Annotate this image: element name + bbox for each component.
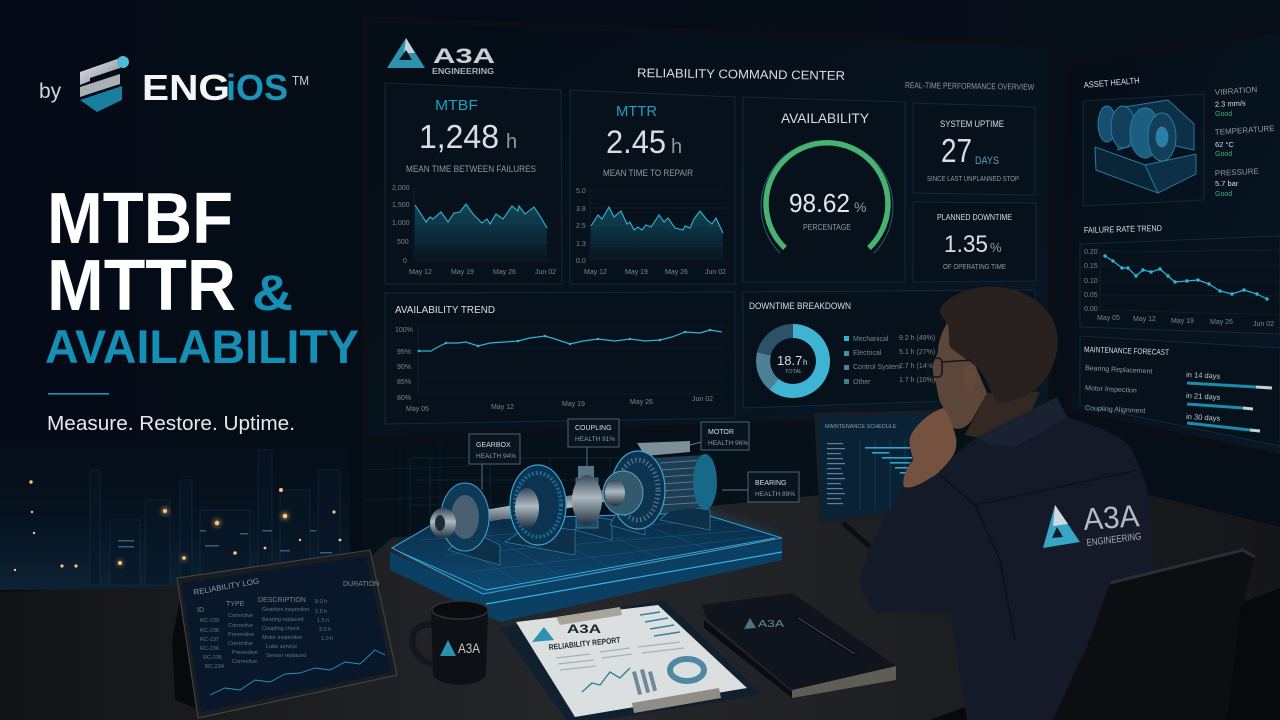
trend line chart [395,327,726,413]
log table: Sensor replaced [266,653,306,659]
clipboard: reliability report [500,600,762,720]
holographic base plate [390,513,782,622]
report logo: A3A [567,622,601,636]
dashboard heading: RELIABILITY COMMAND CENTER [637,66,845,83]
panel: maintenance forecast [1080,336,1280,446]
tagline: Measure. Restore. Uptime. [47,413,295,435]
callout: motor [690,422,749,450]
gauge [761,141,893,253]
vibration reading: 2.3 mm/s [1215,98,1246,109]
log table: DURATION [343,581,379,588]
log table: Corrective [232,659,257,665]
log table: Corrective [228,623,253,629]
MTTR line chart [576,188,726,276]
log table: 3.0 h [319,627,331,633]
gauge: PERCENTAGE [803,223,851,232]
MTTR line chart: 0.0 [576,258,586,265]
pressure reading [1215,167,1259,198]
legend: 2.7 h (14%) [899,363,935,370]
MTTR line chart: 1.3 [576,241,586,248]
callout: coupling: HEALTH 91% [575,436,615,443]
panel: availability trend [385,292,735,424]
trend line chart: 80% [397,395,411,402]
donut chart: TOTAL [785,369,802,375]
MTTR line chart: Jun 02 [705,269,726,276]
failure rate line chart: 0.20 [1084,249,1098,256]
left column: brand logo: by [39,80,62,103]
left column: brand logo [39,56,309,112]
panel: MTTR [570,90,735,284]
forecast rows: Motor Inspection [1085,385,1137,395]
MTBF line chart: 1,000 [392,220,410,227]
legend: 1.7 h (10%) [899,377,935,384]
log table: Gearbox inspection [262,607,309,613]
log table: RC-234 [205,664,224,670]
panel: maintenance forecast: MAINTENANCE FORECAST [1084,345,1169,357]
report chart [582,668,630,692]
forecast rows: in 21 days [1186,391,1221,402]
title: MTBF [47,179,233,259]
panel: failure rate trend [1080,223,1280,334]
callout: motor: MOTOR [708,429,734,436]
small desk monitor: maintenance schedule: MAINTENANCE SCHEDULE [825,424,897,430]
failure rate line chart [1084,249,1280,328]
hologram machine [390,419,799,622]
desk surface [0,495,1280,720]
donut chart [763,331,823,391]
engineer [860,287,1153,720]
failure rate line chart: 0.00 [1084,306,1098,313]
tablet: reliability log: RELIABILITY LOG [193,577,260,597]
callout: bearing: HEALTH 89% [755,491,795,498]
failure rate line chart: May 12 [1133,316,1156,323]
log table: RC-239 [200,618,219,624]
log table: Bearing replaced [262,617,304,623]
MTBF value [406,97,536,174]
panel: system uptime: DAYS [975,155,999,167]
MTTR line chart: 3.8 [576,206,586,213]
report text lines [556,642,684,670]
callout: bearing [722,472,799,502]
pressure reading: Good [1215,191,1232,198]
right side monitor [1066,26,1280,460]
panel: planned downtime [913,202,1036,282]
callout: motor: HEALTH 96% [708,440,748,447]
MTBF value: MTBF [435,97,478,114]
trend line chart: 95% [397,349,411,356]
trend line chart: 100% [395,327,413,334]
wall below monitor [362,417,1054,560]
report logo [532,622,601,642]
notebook: A3A [758,619,784,630]
panel: availability gauge [743,97,905,282]
trend line chart: May 26 [630,399,653,406]
MTTR line chart: 5.0 [576,188,586,195]
panel: planned downtime: PLANNED DOWNTIME [937,212,1012,222]
callout: gearbox: GEARBOX [476,442,511,449]
icon: pump blueprint [1095,100,1196,193]
title [45,179,359,373]
motor [603,441,717,529]
left column: brand logo: iOS [226,67,288,108]
engineer hand [903,408,956,488]
trend line chart: 90% [397,364,411,371]
log table: RC-235 [203,655,222,661]
panel: failure rate trend: FAILURE RATE TREND [1084,223,1162,235]
panel: MTBF [385,83,562,284]
gantt chart [827,440,912,510]
donut chart: h [803,358,807,367]
MTTR line chart: 2.5 [576,223,586,230]
donut chart: 18.7 [777,353,802,368]
log table [197,581,379,670]
panel: asset health: ASSET HEALTH [1083,75,1140,90]
log table: ID [197,607,204,614]
engineer ear [964,364,976,392]
callout: bearing: BEARING [755,480,787,487]
notebook [702,593,896,698]
MTTR value: 2.45 [606,124,666,160]
city skyline window [0,440,350,590]
MTTR line chart: May 12 [584,269,607,276]
MTBF value: MEAN TIME BETWEEN FAILURES [406,164,536,174]
office chair [1053,550,1255,720]
MTTR line chart: May 19 [625,269,648,276]
shaft [443,487,622,529]
logo: A3A Engineering: A3A [433,45,495,68]
failure rate line chart: 0.10 [1084,278,1098,285]
vibration reading [1215,85,1258,118]
panel: system uptime [913,103,1035,195]
callout: coupling: COUPLING [575,425,612,432]
report title: RELIABILITY REPORT [548,636,621,652]
trend line chart: May 05 [406,406,429,413]
trend line chart: May 19 [562,401,585,408]
legend: Mechanical [853,336,889,343]
MTTR value: MTTR [616,103,657,120]
temperature reading: Good [1215,151,1232,158]
MTBF line chart [392,185,556,276]
temperature reading: 62 °C [1215,140,1234,149]
MTTR value: h [671,136,682,158]
coupling hub [572,466,602,528]
log table: 2.5 h [315,609,327,615]
tablet: reliability log [172,550,397,718]
report donut [670,659,704,681]
legend [844,335,935,386]
failure rate line chart: 0.05 [1084,292,1098,299]
forecast rows: Bearing Replacement [1085,365,1153,376]
gearbox housing [430,483,489,551]
MTTR value [603,103,693,178]
pedestals [448,505,710,565]
forecast rows [1085,365,1272,431]
coupling disc [510,465,566,545]
log table: Preventive [232,650,258,656]
gauge: % [854,199,866,215]
forecast rows: Coupling Alignment [1085,405,1146,415]
failure rate line chart: May 19 [1171,318,1194,325]
jacket collar [977,397,1067,447]
forecast rows: in 30 days [1186,412,1221,423]
panel: availability trend: AVAILABILITY TREND [395,305,495,316]
report bars [640,612,680,636]
engineer glasses [928,358,972,377]
left column: brand logo: ENG [142,67,230,108]
legend: Electrical [853,350,882,357]
panel: system uptime: SYSTEM UPTIME [940,119,1004,129]
callout: coupling [568,419,619,466]
MTBF value: 1,248 [419,118,499,155]
panel: downtime breakdown: DOWNTIME BREAKDOWN [749,301,851,312]
panel: planned downtime: OF OPERATING TIME [943,262,1006,271]
coffee mug: A3A [458,640,481,656]
gauge: 98.62 [789,188,850,218]
holographic grid backdrop [410,458,710,540]
main monitor [363,16,1054,442]
log table: Corrective [228,613,253,619]
MTBF value: h [506,131,517,153]
log table: Coupling check [262,626,300,632]
panel: downtime breakdown [743,290,1035,408]
MTBF line chart: 1,500 [392,202,410,209]
pressure reading: PRESSURE [1215,167,1259,178]
legend: Other [853,379,871,386]
failure rate line chart: Jun 02 [1253,321,1274,328]
vibration reading: VIBRATION [1215,85,1258,97]
MTBF line chart: 500 [397,239,409,246]
availability title: AVAILABILITY [781,110,870,126]
MTBF line chart: 0 [403,258,407,265]
log table: Corrective [228,641,253,647]
MTBF line chart: May 26 [493,269,516,276]
MTTR line chart: May 26 [665,269,688,276]
temperature reading: TEMPERATURE [1215,124,1275,137]
log table: RC-238 [200,628,219,634]
MTBF line chart: May 12 [409,269,432,276]
vibration reading: Good [1215,111,1232,118]
pen [797,618,856,655]
jacket logo: A3A [1082,498,1141,537]
failure rate line chart: May 05 [1097,315,1120,322]
log table: RC-236 [200,646,219,652]
panel: system uptime: SINCE LAST UNPLANNED STOP [927,174,1019,183]
jacket logo: ENGINEERING [1086,531,1142,549]
MTBF line chart: Jun 02 [535,269,556,276]
trend line chart: Jun 02 [692,396,713,403]
log table: Lube service [266,644,297,650]
coffee mug [412,601,488,685]
jacket logo [1043,498,1142,549]
small desk monitor: maintenance schedule [814,410,940,547]
pressure reading: 5.7 bar [1215,179,1239,188]
panel: planned downtime: % [990,240,1002,255]
MTBF line chart: 2,000 [392,185,410,192]
title: MTTR [47,246,236,326]
callout: gearbox: HEALTH 94% [476,453,516,460]
title: AVAILABILITY [45,320,359,373]
legend: 9.2 h (49%) [899,335,935,342]
failure rate line chart: 0.15 [1084,263,1098,270]
log table: DESCRIPTION [258,597,306,604]
left column: brand logo: TM [292,73,309,88]
engineer hair [940,287,1058,403]
tablet sparkline [210,650,385,695]
log table: 8.0 h [315,599,327,605]
legend: Control System [853,364,901,371]
title: & [252,265,293,321]
desk front edge [930,588,1280,720]
dashboard subheading: REAL-TIME PERFORMANCE OVERVIEW [905,80,1034,92]
engineer neck and face [933,323,1040,445]
engineer jacket [860,397,1153,720]
log table: RC-237 [200,637,219,643]
log table: 1.0 h [321,636,333,642]
logo: A3A Engineering [387,38,495,76]
legend: 5.1 h (27%) [899,349,935,356]
panel: asset health [1083,75,1275,206]
log table: TYPE [226,601,245,608]
log table: Preventive [228,632,254,638]
log table: 1.5 h [317,618,329,624]
icon: ENGiOS mark [80,56,129,112]
panel: planned downtime: 1.35 [944,231,988,258]
failure rate line chart: May 26 [1210,319,1233,326]
callout: gearbox [469,434,520,490]
forecast rows: in 14 days [1186,370,1221,381]
MTTR value: MEAN TIME TO REPAIR [603,168,693,178]
trend line chart: May 12 [491,404,514,411]
jacket seam [940,470,1138,640]
panel: system uptime: 27 [941,132,972,169]
logo: A3A Engineering: ENGINEERING [432,67,494,76]
log table: Motor inspection [262,635,302,641]
MTBF line chart: May 19 [451,269,474,276]
temperature reading [1215,124,1275,158]
trend line chart: 85% [397,379,411,386]
